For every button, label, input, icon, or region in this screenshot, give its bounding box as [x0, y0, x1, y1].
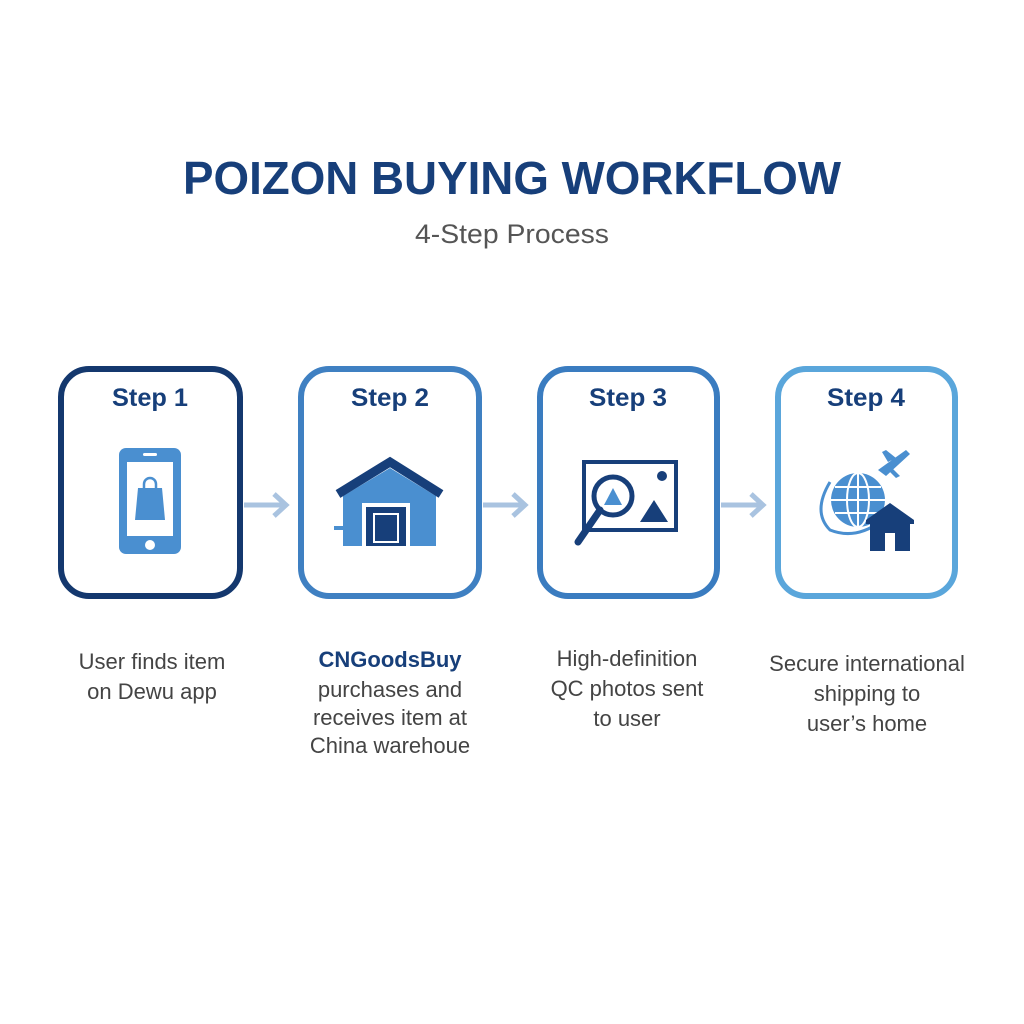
caption 2: [310, 647, 470, 758]
caption 4: Secure international: [769, 651, 965, 676]
arrow 2: [483, 494, 525, 516]
caption 1: User finds item: [79, 649, 225, 674]
card: step 1: [61, 369, 240, 596]
caption 4: user’s home: [807, 711, 927, 736]
caption 2: CNGoodsBuy: [318, 647, 462, 672]
caption 3: [551, 646, 703, 731]
card: step 4: [778, 369, 955, 596]
icon: warehouse: [334, 462, 441, 546]
icon: globe, plane and house: [821, 450, 914, 551]
card: step 1: Step 1: [112, 384, 188, 412]
card: step 3: Step 3: [589, 384, 667, 412]
arrow 1: [244, 494, 286, 516]
card: step 3: [540, 369, 717, 596]
icon: phone with bag: [119, 448, 181, 554]
caption 3: to user: [593, 706, 661, 731]
card: step 2: [301, 369, 479, 596]
caption 3: High-definition: [557, 646, 697, 671]
subtitle: 4-Step Process: [415, 219, 609, 249]
caption 2: purchases and: [318, 677, 462, 702]
arrow 3: [721, 494, 763, 516]
caption 1: [79, 649, 225, 704]
caption 3: QC photos sent: [551, 676, 703, 701]
caption 2: receives item at: [313, 705, 467, 730]
caption 4: shipping to: [814, 681, 920, 706]
caption 4: [769, 651, 965, 736]
title: POIZON BUYING WORKFLOW: [183, 152, 842, 204]
caption 1: on Dewu app: [87, 679, 217, 704]
card: step 2: Step 2: [351, 384, 429, 412]
caption 2: China warehoue: [310, 733, 470, 758]
icon: photo with magnifier: [578, 462, 676, 542]
card: step 4: Step 4: [827, 384, 905, 412]
